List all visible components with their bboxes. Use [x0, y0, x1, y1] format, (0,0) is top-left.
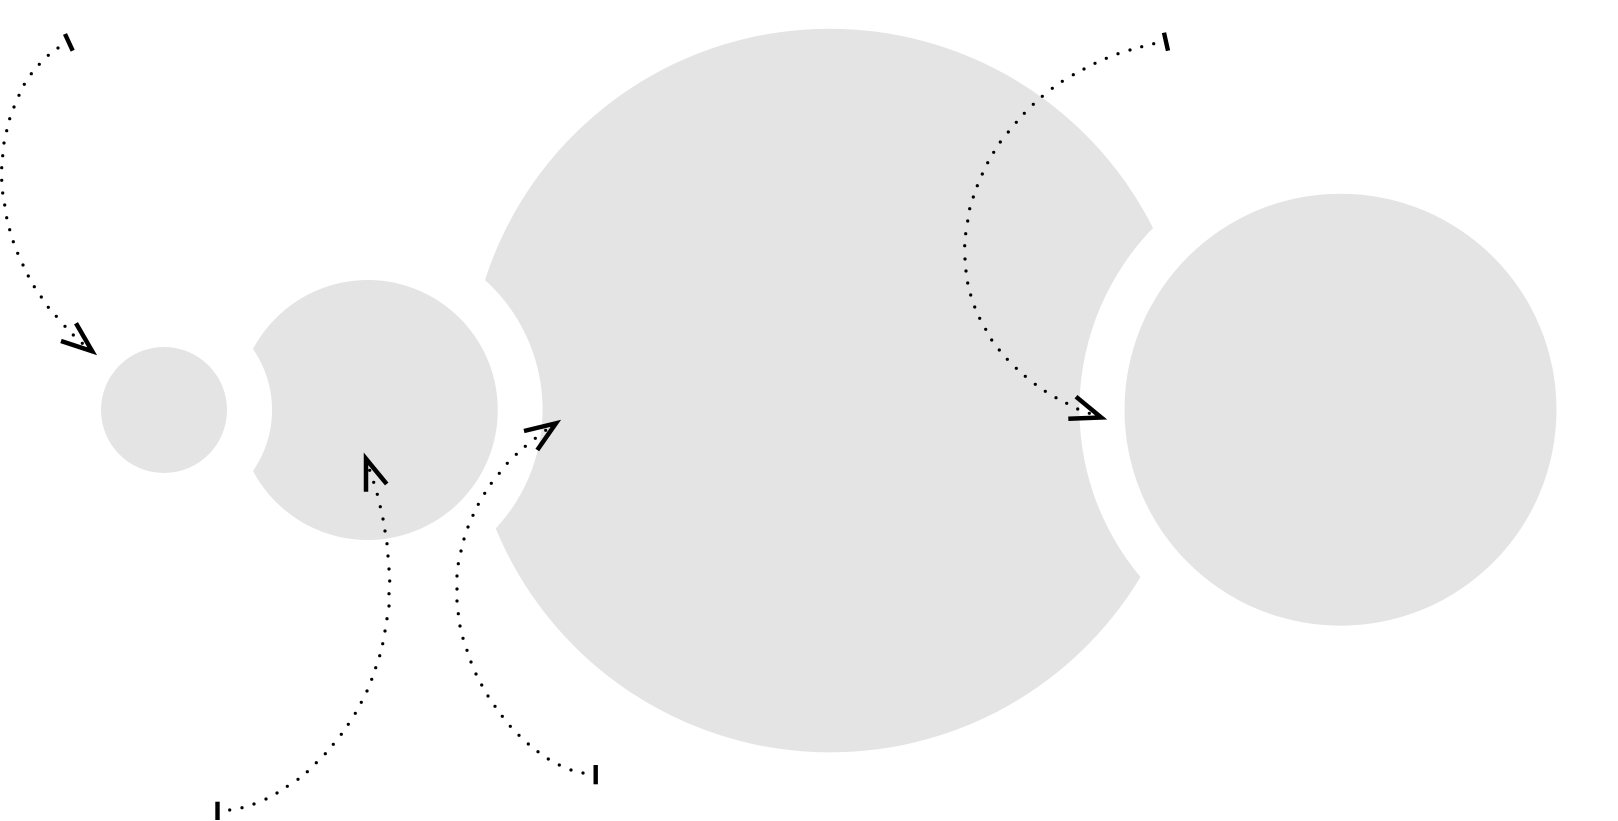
circle: smallest: [101, 347, 227, 473]
circle: right: [1124, 194, 1556, 626]
arrow: bottom centre to largest circle: [457, 423, 596, 784]
arrow: bottom left to second circle: [218, 459, 390, 820]
arrow: top right to right circle: [965, 33, 1168, 419]
arrow: top left to smallest circle: [2, 34, 92, 351]
circle: largest, with two cut-outs: [485, 29, 1153, 752]
circle: second, with crescent cut-out: [253, 280, 498, 540]
